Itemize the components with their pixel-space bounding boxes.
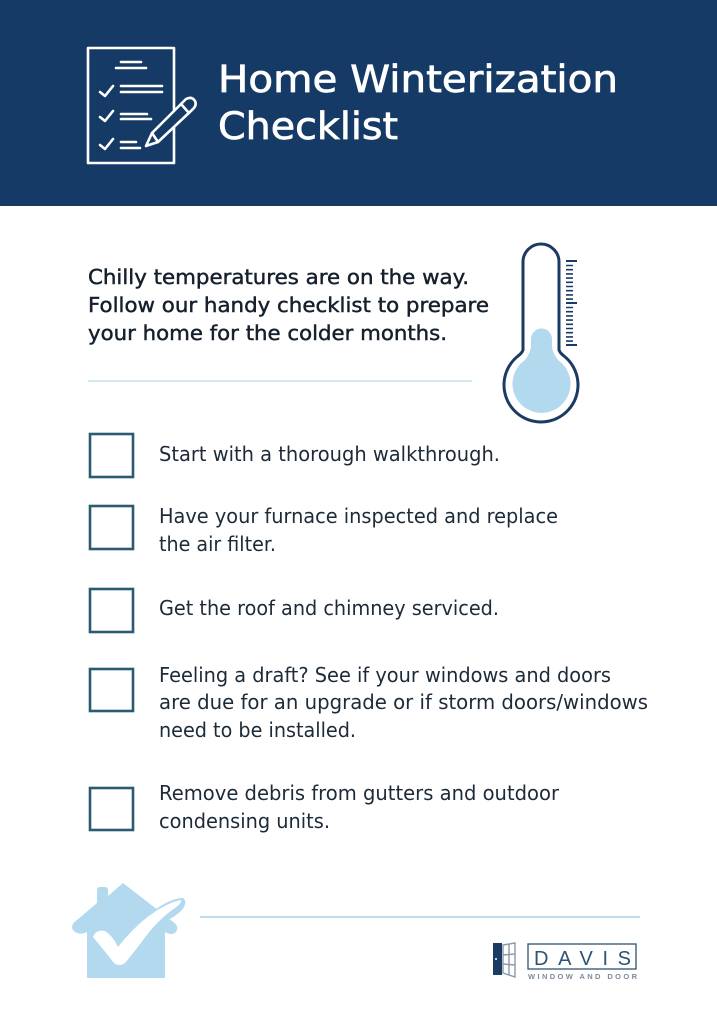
checklist item 2: Have your furnace inspected and replace — [159, 504, 558, 528]
intro text: Chilly temperatures are on the way. — [88, 265, 469, 289]
checklist item 5 — [90, 781, 560, 833]
icon: open door — [493, 943, 515, 977]
intro text — [88, 265, 489, 345]
wordmark box — [528, 944, 636, 969]
title: Home Winterization — [218, 58, 618, 101]
checklist item 4 — [90, 663, 648, 742]
logo: Davis Window and Door — [493, 943, 638, 981]
checklist item 2 — [90, 504, 558, 556]
icon: house with checkmark — [72, 883, 185, 978]
checklist item 4: need to be installed. — [159, 718, 356, 742]
checklist item 2: the air filter. — [159, 532, 276, 556]
checklist item 5: condensing units. — [159, 809, 330, 833]
icon: checklist with pencil — [88, 48, 196, 163]
wordmark: DAVIS — [534, 948, 631, 970]
title: Checklist — [218, 105, 398, 148]
checklist item 4: are due for an upgrade or if storm doors/windows — [159, 690, 648, 714]
title — [218, 58, 618, 148]
checklist item 5: Remove debris from gutters and outdoor — [159, 781, 560, 805]
checklist item 3: Get the roof and chimney serviced. — [159, 596, 499, 620]
checklist item 4: Feeling a draft? See if your windows and doors — [159, 663, 611, 687]
tagline: WINDOW AND DOOR — [528, 972, 638, 981]
intro text: Follow our handy checklist to prepare — [88, 293, 489, 317]
intro text: your home for the colder months. — [88, 321, 447, 345]
checklist item 3 — [90, 589, 499, 632]
icon: thermometer — [504, 244, 578, 422]
checklist item 1: Start with a thorough walkthrough. — [159, 442, 500, 466]
header banner — [0, 0, 717, 206]
checklist item 1 — [90, 434, 500, 477]
